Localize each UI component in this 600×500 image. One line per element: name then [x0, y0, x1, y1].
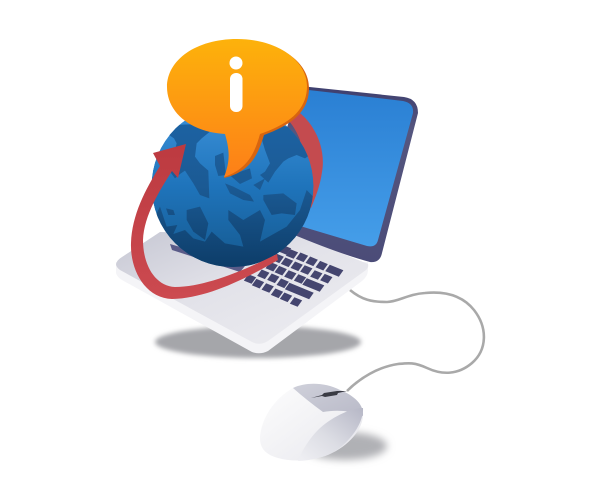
laptop screen	[300, 89, 413, 246]
arrow: front part	[131, 144, 278, 299]
keyboard band under globe	[170, 244, 245, 272]
mouse top panel	[293, 384, 363, 416]
mouse scroll wheel	[311, 391, 347, 398]
speech bubble	[167, 39, 309, 178]
globe	[152, 120, 314, 267]
laptop hinge and screen frame	[280, 86, 418, 262]
bubble body	[167, 39, 307, 177]
laptop	[116, 86, 418, 353]
mouse cable	[347, 290, 484, 391]
mouse shadow	[303, 432, 387, 460]
icon: info i	[230, 56, 242, 112]
mouse palm shade	[298, 408, 363, 461]
arrow: back part	[286, 110, 323, 208]
continents	[156, 124, 313, 267]
mouse	[260, 384, 363, 461]
keyboard	[244, 245, 343, 307]
laptop base top	[116, 232, 368, 344]
laptop base side	[116, 262, 368, 353]
bubble edge	[170, 41, 309, 178]
mouse body	[260, 384, 363, 460]
laptop shadow	[155, 326, 361, 358]
